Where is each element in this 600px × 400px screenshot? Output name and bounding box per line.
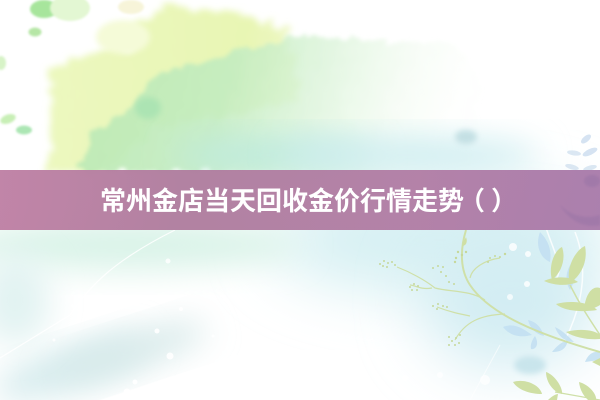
white thin line and sparkles xyxy=(0,225,583,400)
blurred blue spot xyxy=(514,356,546,374)
title: ） xyxy=(491,186,517,216)
yellow-green paint splash xyxy=(45,8,300,172)
pale circle on splash xyxy=(96,20,150,54)
title: 常州金店当天回收金价行情走势 xyxy=(100,186,464,216)
pink title band xyxy=(0,170,600,230)
title: （ xyxy=(459,186,485,216)
green branch with leaves xyxy=(379,230,600,400)
band leaf shadow xyxy=(560,175,600,226)
lower blue-green wash xyxy=(0,185,600,400)
green textured wash xyxy=(78,35,540,173)
seed clusters xyxy=(379,251,506,346)
pale blue leaves xyxy=(503,133,600,362)
decorative green dots xyxy=(0,0,144,134)
